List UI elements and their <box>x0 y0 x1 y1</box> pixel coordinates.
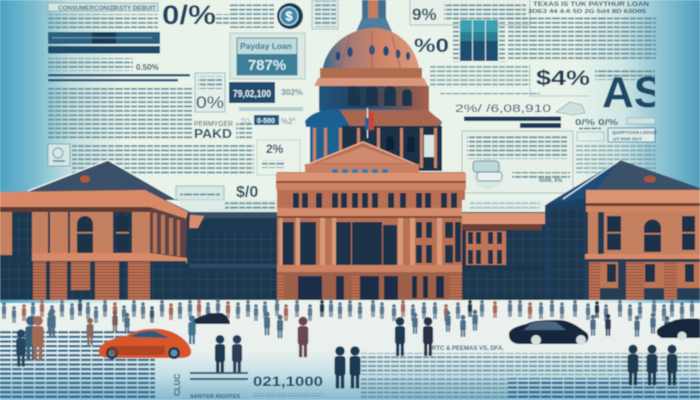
roof: left wing <box>28 160 178 200</box>
icon: dollar coin: $ <box>285 8 293 24</box>
9% box: 9% <box>412 5 437 24</box>
bold notice <box>48 74 190 81</box>
icon box <box>48 144 70 166</box>
rotated label: CLUC <box>173 374 182 396</box>
rights line <box>440 93 540 96</box>
text block <box>48 14 158 30</box>
bottom label: RTC & PEEMAS VS, DFA. <box>432 346 504 352</box>
small box <box>577 127 604 141</box>
pediment <box>304 142 419 166</box>
text lines: bottom middle <box>360 378 508 400</box>
box: quote <box>608 128 658 142</box>
text lines: bottom left <box>0 331 155 400</box>
callout: payday loan rate: 787% <box>248 57 286 74</box>
value strip <box>239 107 303 127</box>
value pair: 0/% 0/% <box>575 117 619 127</box>
paragraph <box>508 16 656 61</box>
small text <box>595 68 655 80</box>
midground crowd <box>47 310 670 338</box>
lower left notes <box>190 372 323 400</box>
table numerals <box>48 58 133 71</box>
value box: 79,02,100 <box>233 89 271 100</box>
progress bars <box>464 116 561 128</box>
value strip: 0-500 <box>257 118 275 125</box>
left wing building <box>0 190 190 300</box>
percent glyph: %0 <box>414 36 449 57</box>
small column <box>452 18 460 62</box>
callout: payday loan rate: Payday Loan <box>240 41 292 51</box>
9% box <box>410 0 530 25</box>
value 0.50%: 0.50% <box>136 63 159 72</box>
left connector building <box>180 200 277 300</box>
paragraph <box>72 144 254 176</box>
header strip: LASTY DEBUIT <box>111 5 156 12</box>
panel: right document collage <box>410 0 663 193</box>
small zero percent box <box>195 73 225 112</box>
small card <box>176 186 224 200</box>
faded percent: 302% <box>281 87 303 97</box>
bordered paragraph <box>462 131 573 193</box>
callout: payday loan rate <box>230 33 305 79</box>
value line: 2%/ /6,08,910 <box>455 103 551 115</box>
small zero percent box: 0% <box>196 93 224 112</box>
background crowd <box>2 299 694 323</box>
header strip <box>48 3 158 12</box>
dark car right <box>657 318 700 340</box>
small strip <box>627 118 655 124</box>
small text <box>236 122 252 140</box>
large number: 021,1000 <box>253 373 323 389</box>
flag <box>365 108 374 138</box>
mini table <box>312 0 338 29</box>
icon: dollar coin <box>277 3 303 29</box>
paragraph <box>48 87 193 139</box>
bordered paragraph: 5009, 6% <box>539 178 562 184</box>
text lines: bottom center-right <box>360 353 700 375</box>
heading fragment <box>194 119 233 141</box>
heading <box>528 1 649 15</box>
paragraph <box>430 64 530 88</box>
box: $4%: $4% <box>536 67 590 90</box>
dark data table <box>48 32 160 54</box>
box: $4% <box>530 65 590 96</box>
dollar glyph: $/0 <box>236 184 258 201</box>
dome drum <box>305 68 442 127</box>
central facade <box>276 164 466 300</box>
right wing building <box>545 190 700 300</box>
roof: right wing <box>545 160 700 210</box>
large AS: AS <box>602 68 663 117</box>
panel: left document collage <box>48 0 338 201</box>
value strip: 70 <box>240 117 250 127</box>
dome lantern <box>355 0 393 34</box>
column of text <box>230 2 274 28</box>
value 2% <box>257 140 300 175</box>
heading: TEXAS IS TUK PAYTHUR LOAN <box>533 1 649 8</box>
value box <box>229 82 275 103</box>
black car <box>509 320 588 345</box>
heading fragment: PERMYGER <box>194 119 233 128</box>
small text <box>216 14 230 25</box>
dark car center <box>192 313 230 324</box>
heat table <box>460 20 498 61</box>
orange car <box>99 329 191 359</box>
value strip: %2° <box>281 117 296 126</box>
text lines: bottom right <box>508 378 700 400</box>
box: quote: QUPPTOAN LEDGE <box>612 130 658 136</box>
capitol dome <box>322 28 420 74</box>
foreground figures <box>16 308 677 388</box>
rotunda colonnade <box>310 126 442 171</box>
small column <box>499 18 506 62</box>
header strip: CONSUMERCONCT <box>58 5 116 12</box>
lower left notes: SARITER RIGHTES <box>190 394 240 400</box>
value 2%: 2% <box>266 142 284 156</box>
plaza ground <box>0 303 700 400</box>
rate glyph: 0/% <box>162 0 216 30</box>
heading fragment: PAKD <box>194 127 232 141</box>
heading: 3DE3 44 4-6 5D 2G 5d4 8D 63D05 <box>528 9 646 15</box>
right connector building <box>462 200 554 300</box>
sketch <box>556 102 585 115</box>
paragraph <box>576 143 656 173</box>
box: quote: UT PAR OUT <box>613 136 642 142</box>
